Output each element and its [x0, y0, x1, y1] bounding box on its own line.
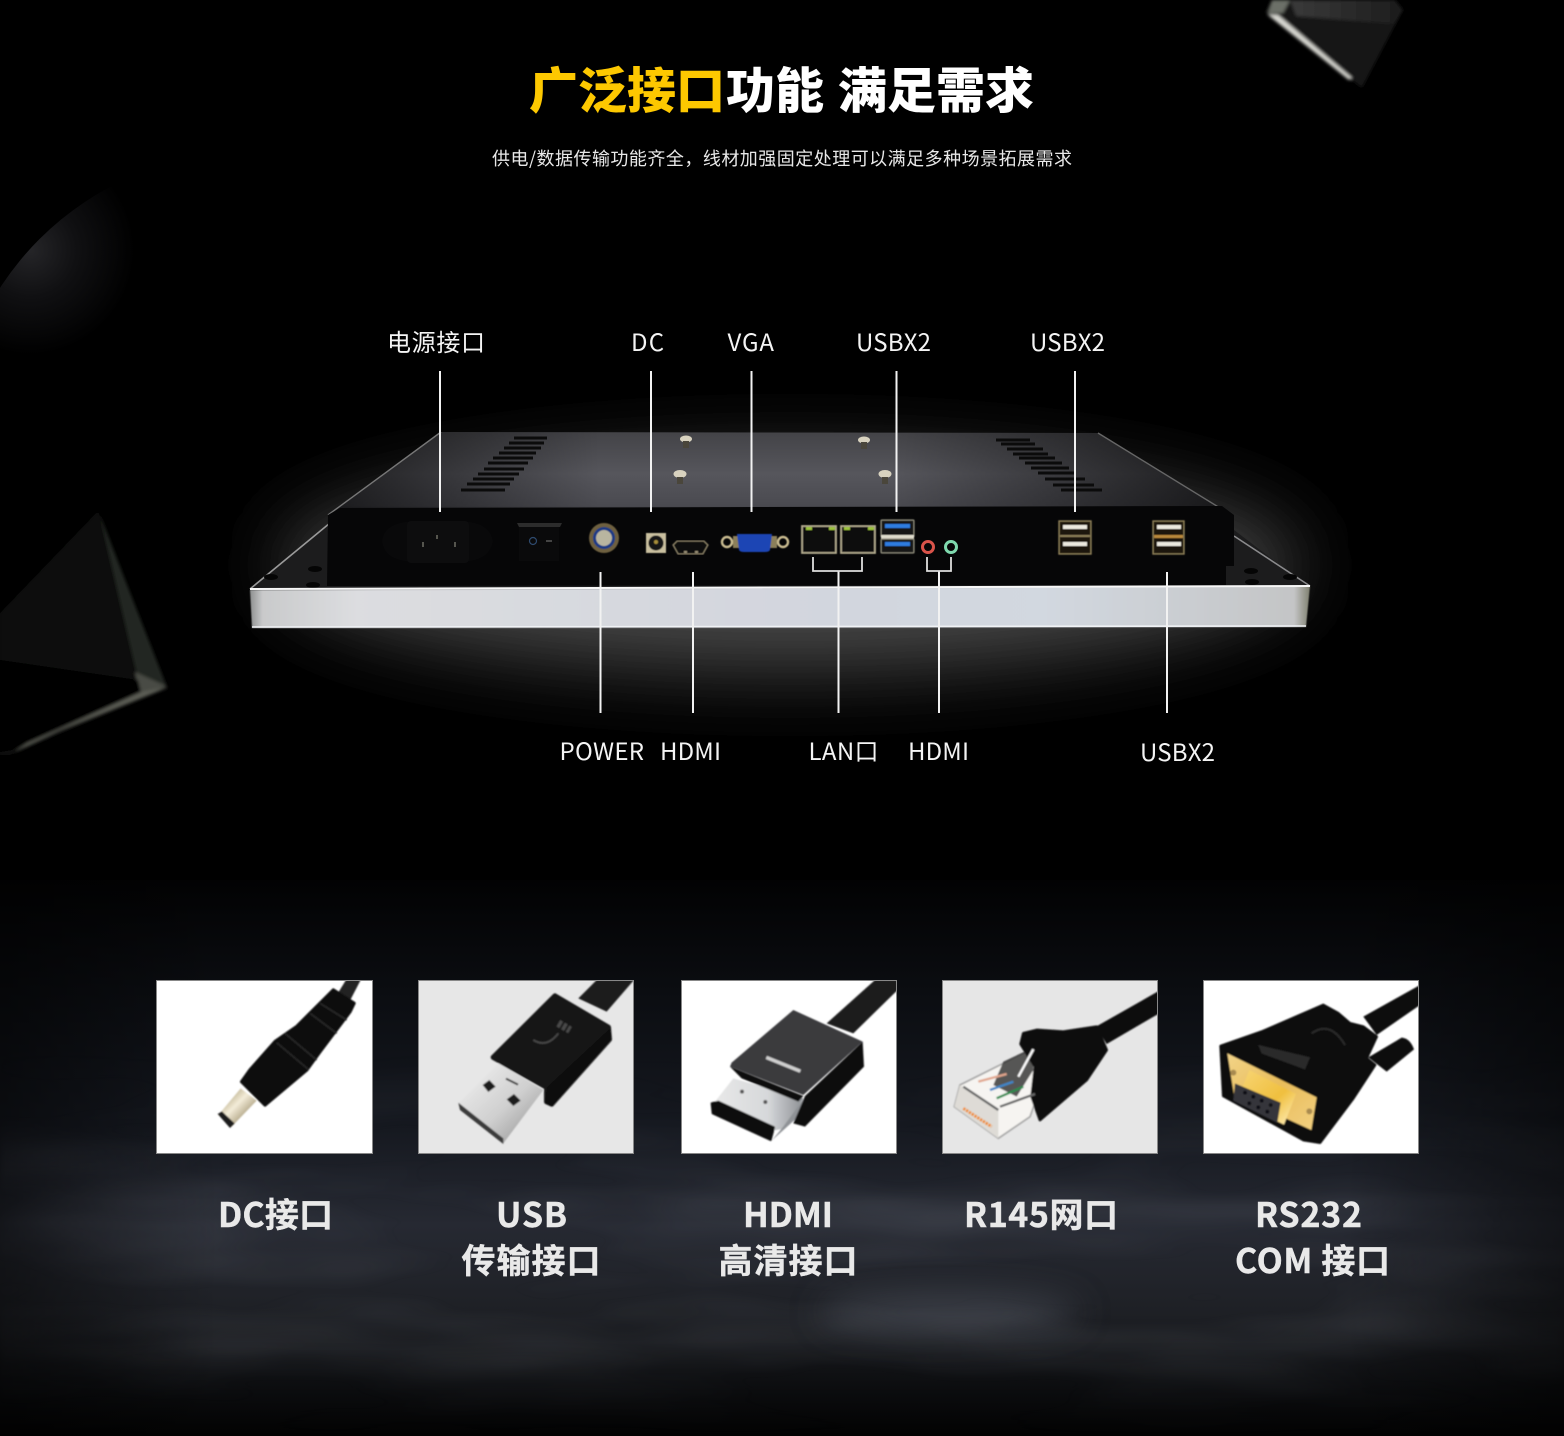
strip highlight: [250, 586, 1310, 589]
leader lines: [440, 371, 1167, 713]
mounting screws: [674, 436, 892, 484]
caption: DC: DC接口: [218, 1188, 333, 1237]
HDMI port: [673, 541, 708, 554]
top plate right edge: [1098, 433, 1233, 516]
label: power socket: 电源接口: [387, 323, 485, 358]
caption: RS232 COM: COM 接口: [1235, 1234, 1390, 1283]
title: 满足需求: [838, 52, 1034, 123]
title: 广泛接口: [529, 52, 725, 123]
decoration: prism top right: [1265, 0, 1403, 88]
caption: USB: 传输接口: [462, 1234, 600, 1283]
label: HDMI one: HDMI: [660, 732, 721, 767]
bottom smoky background: [0, 921, 1564, 1418]
label: DC: DC: [631, 323, 664, 358]
thumbnail: USB plug: [418, 980, 634, 1154]
glow behind monitor: [280, 460, 1300, 670]
label: HDMI two: HDMI: [908, 732, 969, 767]
caption: HDMI: HDMI: [743, 1188, 833, 1237]
caption: HDMI: [718, 1188, 858, 1283]
LAN ports: [802, 526, 875, 553]
VGA port: [722, 534, 788, 552]
vents right: [996, 440, 1102, 490]
top plate: [328, 432, 1234, 516]
rocker switch: [517, 523, 562, 561]
label: USBX2 three: USBX2: [1140, 733, 1215, 768]
label: VGA: VGA: [728, 323, 774, 358]
base screws: [264, 566, 1297, 588]
power socket: [382, 521, 493, 563]
thumbnail: RJ45 plug: [942, 980, 1159, 1154]
subtitle: 供电/数据传输功能齐全，线材加强固定处理可以满足多种场景拓展需求: [492, 145, 1072, 171]
caption: R145: R145网口: [964, 1188, 1118, 1237]
label: USBX2 two: USBX2: [1030, 323, 1105, 358]
rear panel: [327, 506, 1234, 586]
caption: RS232 COM: RS232: [1255, 1188, 1362, 1237]
thumbnail: DC plug: [156, 980, 373, 1154]
left bezel edge: [250, 523, 330, 589]
USB ports right: [1153, 521, 1184, 554]
power connector: [589, 523, 619, 553]
top plate left edge: [328, 432, 441, 515]
audio jacks: [922, 542, 956, 552]
top plate side shading: [328, 432, 1234, 516]
label: USBX2 one: USBX2: [856, 323, 931, 358]
label: LAN: LAN口: [808, 732, 878, 767]
monitor base plate: [250, 525, 1310, 600]
thumbnail: HDMI plug: [681, 980, 898, 1154]
right bezel edge: [1234, 536, 1310, 586]
thumbnail: RS232 plug: [1203, 980, 1420, 1154]
caption: RS232 COM: [1235, 1188, 1390, 1283]
USB 3 ports: [881, 520, 914, 553]
strip bottom highlight: [252, 626, 1306, 627]
decoration: prism left: [0, 511, 168, 755]
monitor: [250, 432, 1310, 628]
title: 功能: [726, 52, 824, 123]
caption: HDMI: 高清接口: [718, 1234, 858, 1283]
DC jack: [646, 533, 666, 553]
silver front strip: [250, 586, 1310, 628]
label: POWER: POWER: [560, 732, 644, 767]
thumbnail borders: [156, 980, 1418, 1154]
caption: USB: USB: [496, 1188, 567, 1237]
USB ports middle: [1059, 521, 1091, 554]
caption: USB: [462, 1188, 600, 1283]
vents left: [461, 438, 547, 490]
decoration: sphere top left: [0, 199, 109, 328]
